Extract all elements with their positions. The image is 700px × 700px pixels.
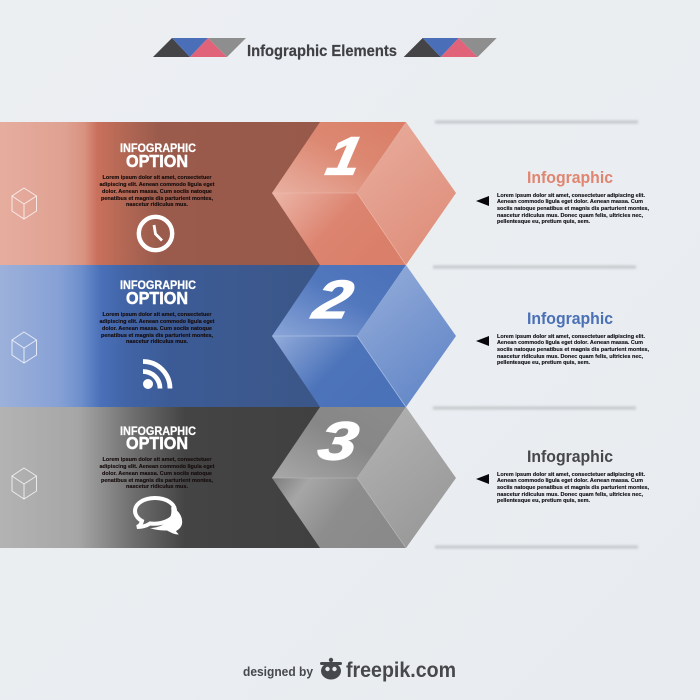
heading 2: INFOGRAPHIC	[120, 280, 196, 292]
cube 1	[272, 122, 456, 265]
header emblem: left	[153, 38, 246, 57]
heading 2	[120, 280, 196, 308]
text block 3: adipiscing elit. Aenean commodo ligula eget	[100, 464, 215, 470]
callout heading 1: Infographic	[527, 168, 613, 187]
cube 2	[272, 265, 456, 407]
text block 2: adipiscing elit. Aenean commodo ligula eget	[100, 319, 215, 325]
text block 1: Lorem ipsum dolor sit amet, consectetuer	[102, 175, 212, 181]
callout heading 2: Infographic	[527, 309, 613, 328]
text block 2: penatibus et magnis dis parturient montes,	[101, 333, 214, 339]
footer credit	[243, 658, 456, 682]
panel: option 3	[0, 407, 456, 548]
callout 1	[476, 168, 650, 225]
callout 3	[476, 447, 650, 504]
designed by: designed by	[243, 664, 314, 679]
heading 3	[120, 426, 196, 453]
panel: option 1	[0, 122, 456, 265]
heading 2: OPTION	[126, 288, 188, 308]
icon: cube outline 3	[12, 468, 36, 499]
text block 3: nascetur ridiculus mus.	[126, 484, 189, 490]
heading 3: INFOGRAPHIC	[120, 426, 196, 438]
heading 1	[120, 143, 196, 171]
text block 1	[100, 175, 215, 208]
heading 1: OPTION	[126, 151, 188, 171]
callout text 3: Aenean commodo ligula eget dolor. Aenean massa. Cum	[497, 478, 643, 484]
text block 2	[100, 312, 215, 345]
callout text 1: sociis natoque penatibus et magnis dis parturient montes,	[497, 206, 650, 212]
cube 3	[272, 407, 456, 548]
callout text 3: pellentesque eu, pretium quis, sem.	[497, 498, 591, 504]
title: Infographic Elements	[247, 43, 397, 60]
freepik.com: freepik.com	[346, 659, 456, 682]
text block 1: adipiscing elit. Aenean commodo ligula eget	[100, 182, 215, 188]
text block 3	[100, 457, 215, 490]
callout text 3: nascetur ridiculus mus. Donec quam felis, ultricies nec,	[497, 492, 644, 498]
callout text 3: sociis natoque penatibus et magnis dis parturient montes,	[497, 485, 650, 491]
shadow lines	[433, 120, 638, 548]
icon: clock	[139, 217, 172, 250]
callout text 1: Aenean commodo ligula eget dolor. Aenean massa. Cum	[497, 199, 643, 205]
text block 2: dolor. Aenean massa. Cum sociis natoque	[102, 326, 212, 332]
callout text 2: pellentesque eu, pretium quis, sem.	[497, 360, 591, 366]
number 1: 1	[321, 126, 367, 187]
text block 1: nascetur ridiculus mus.	[126, 202, 189, 208]
heading 3: OPTION	[126, 433, 188, 453]
callout text 3	[497, 472, 650, 504]
callout text 2: Lorem ipsum dolor sit amet, consectetuer adipiscing elit.	[497, 334, 645, 340]
callout text 2	[497, 334, 650, 366]
text block 3: penatibus et magnis dis parturient montes,	[101, 478, 214, 484]
band 1	[0, 122, 325, 265]
callout text 2: nascetur ridiculus mus. Donec quam felis, ultricies nec,	[497, 354, 644, 360]
icon: rss	[143, 362, 170, 389]
arrow 2	[476, 336, 489, 346]
callout text 2: Aenean commodo ligula eget dolor. Aenean massa. Cum	[497, 340, 643, 346]
callout 2	[476, 309, 650, 366]
band 2	[0, 265, 325, 407]
heading 1: INFOGRAPHIC	[120, 143, 196, 155]
callout text 3: Lorem ipsum dolor sit amet, consectetuer adipiscing elit.	[497, 472, 645, 478]
text block 3: dolor. Aenean massa. Cum sociis natoque	[102, 471, 212, 477]
panel: option 2	[0, 265, 456, 407]
text block 1: penatibus et magnis dis parturient montes,	[101, 196, 214, 202]
text block 2: Lorem ipsum dolor sit amet, consectetuer	[102, 312, 212, 318]
icon: cube outline 1	[12, 188, 36, 219]
band 3	[0, 407, 325, 548]
icon: freepik mascot	[320, 658, 342, 680]
icon: chat bubbles	[135, 498, 182, 534]
callout text 1: nascetur ridiculus mus. Donec quam felis, ultricies nec,	[497, 213, 644, 219]
arrow 3	[476, 474, 489, 484]
callout text 2: sociis natoque penatibus et magnis dis parturient montes,	[497, 347, 650, 353]
text block 2: nascetur ridiculus mus.	[126, 339, 189, 345]
callout heading 3: Infographic	[527, 447, 613, 466]
number 2: 2	[307, 269, 359, 330]
text block 1: dolor. Aenean massa. Cum sociis natoque	[102, 189, 212, 195]
icon: cube outline 2	[12, 332, 36, 363]
callout text 1: Lorem ipsum dolor sit amet, consectetuer adipiscing elit.	[497, 193, 645, 199]
header	[153, 38, 497, 60]
header emblem: right	[404, 38, 497, 57]
text block 3: Lorem ipsum dolor sit amet, consectetuer	[102, 457, 212, 463]
arrow 1	[476, 196, 489, 206]
number 3: 3	[314, 412, 363, 472]
callout text 1	[497, 193, 650, 225]
callout text 1: pellentesque eu, pretium quis, sem.	[497, 219, 591, 225]
